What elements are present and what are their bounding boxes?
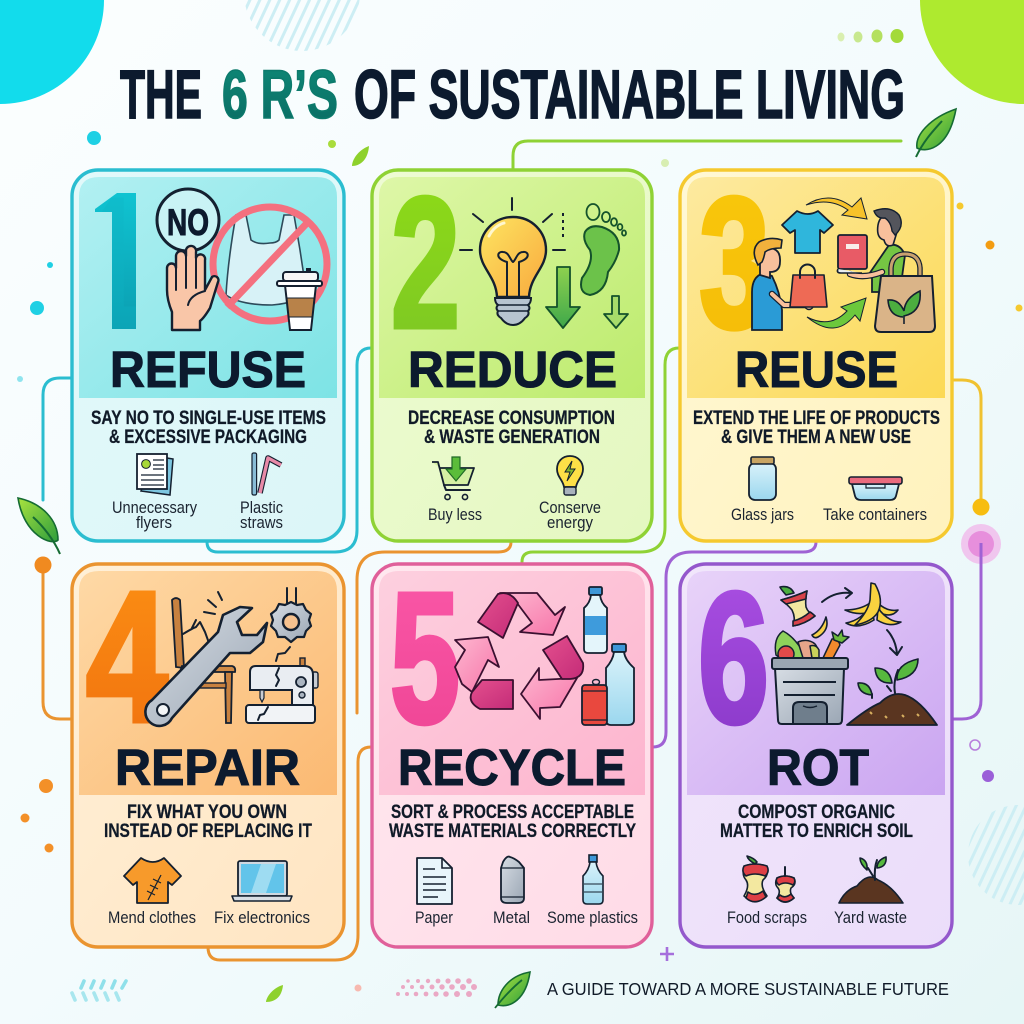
label: yard waste: Yard waste <box>834 908 907 927</box>
heading: recycle: RECYCLE <box>398 739 626 796</box>
decorative pink dot field <box>396 978 477 997</box>
description: refuse: & EXCESSIVE PACKAGING <box>109 427 307 448</box>
icon: person receiving <box>850 209 905 292</box>
icon: down arrow small <box>604 296 628 328</box>
description: reduce <box>408 408 615 448</box>
label: metal: Metal <box>493 908 530 927</box>
panel: reuse <box>680 160 952 541</box>
panel: repair <box>72 554 344 947</box>
label: buy less: Buy less <box>428 505 482 524</box>
icon: soil and sprout <box>847 659 937 725</box>
label: unnecessary flyers: flyers <box>136 513 172 532</box>
leaf left <box>18 498 60 554</box>
description: refuse <box>91 408 326 448</box>
description: reuse: & GIVE THEM A NEW USE <box>721 427 911 448</box>
small leaf bottom <box>266 985 283 1002</box>
leaf footer <box>495 972 530 1008</box>
icon: arrow to sprout <box>887 630 902 655</box>
description: reuse: EXTEND THE LIFE OF PRODUCTS <box>693 408 940 429</box>
icon: red book <box>837 235 867 273</box>
number 1 <box>95 193 136 329</box>
icon: sewing machine <box>246 658 318 723</box>
description: reduce: & WASTE GENERATION <box>424 427 600 448</box>
icon: energy bulb <box>557 456 583 495</box>
panel: refuse <box>72 161 344 541</box>
icon: down arrow large <box>546 267 580 328</box>
description: repair <box>104 802 312 842</box>
label: conserve energy <box>539 498 601 532</box>
label: plastic straws: Plastic <box>240 498 283 517</box>
decorative striped circle right <box>968 805 1024 905</box>
icon: food container <box>849 477 902 500</box>
number 6: 6 <box>698 555 769 762</box>
panel: recycle <box>372 555 652 947</box>
description: repair: FIX WHAT YOU OWN <box>127 802 287 823</box>
icon: food scraps <box>743 856 795 902</box>
icon: small water bottle <box>584 587 607 653</box>
title <box>120 56 905 133</box>
icon: green arrow <box>807 298 866 328</box>
icon: paper <box>417 858 452 904</box>
label: conserve energy: energy <box>547 513 593 532</box>
icon: flyers <box>137 454 173 495</box>
label: plastic straws <box>240 498 283 532</box>
heading: rot: ROT <box>767 739 869 796</box>
decorative corner circle: lime <box>920 0 1024 104</box>
connector node: pink target <box>961 524 1001 565</box>
icon: prohibited plastic bag <box>213 207 327 321</box>
icon: footprint <box>581 204 626 295</box>
description: recycle: SORT & PROCESS ACCEPTABLE <box>391 802 634 823</box>
description: reduce: DECREASE CONSUMPTION <box>408 408 615 429</box>
icon: person giving <box>752 238 814 330</box>
icon: plastic straws <box>252 453 281 495</box>
panel: rot <box>680 555 952 947</box>
icon: coffee cup <box>277 268 322 330</box>
icon: apple core <box>780 587 815 626</box>
icon: banana piece <box>812 617 827 638</box>
leaf top right <box>916 109 956 157</box>
connector node: orange <box>34 556 52 574</box>
description: rot: COMPOST ORGANIC <box>738 802 895 823</box>
icon: large water bottle <box>606 644 634 725</box>
label: unnecessary flyers <box>112 498 197 532</box>
icon: yard waste <box>839 857 903 903</box>
heading: reduce: REDUCE <box>408 341 617 398</box>
icon: gear <box>271 588 311 661</box>
small leaf near title <box>352 146 369 166</box>
icon: glass jar <box>749 457 776 500</box>
icon: no sign <box>157 189 219 251</box>
icon: light bulb <box>460 198 565 325</box>
label: take containers: Take containers <box>823 505 927 524</box>
icon: vegetables <box>775 630 849 662</box>
label: some plastics: Some plastics <box>547 908 638 927</box>
icon: broken chair <box>172 592 235 723</box>
icon: recycling symbol <box>455 593 583 719</box>
icon: mended shirt <box>124 858 181 903</box>
label: conserve energy: Conserve <box>539 498 601 517</box>
decorative hatch marks bottom left <box>72 981 126 1000</box>
description: reuse <box>693 408 940 448</box>
icon: no sign: NO <box>167 202 209 243</box>
icon: shopping cart <box>432 457 474 500</box>
title: THE <box>120 56 202 133</box>
label: fix electronics: Fix electronics <box>214 908 310 927</box>
icon: red shopping bag <box>790 265 827 307</box>
heading: repair: REPAIR <box>115 739 300 796</box>
icon: banana peel <box>845 583 901 626</box>
icon: compost bin <box>772 658 848 724</box>
number 4: 4 <box>86 554 168 761</box>
panel: reduce <box>372 160 652 541</box>
icon: red can <box>582 680 607 725</box>
icon: yellow arrow <box>806 198 867 219</box>
icon: laptop <box>232 861 292 901</box>
heading: reuse: REUSE <box>735 341 898 398</box>
connector lines <box>43 141 981 960</box>
number 3: 3 <box>699 160 770 367</box>
number 5: 5 <box>390 555 460 762</box>
icon: plastic bottle <box>583 855 603 904</box>
description: refuse: SAY NO TO SINGLE-USE ITEMS <box>91 408 326 429</box>
label: mend clothes: Mend clothes <box>108 908 196 927</box>
description: recycle <box>389 802 636 842</box>
description: rot: MATTER TO ENRICH SOIL <box>720 821 913 842</box>
decorative corner circle: cyan <box>0 0 104 104</box>
number 2: 2 <box>391 160 460 367</box>
description: rot <box>720 802 913 842</box>
connector node: yellow <box>972 498 990 516</box>
decorative plus <box>660 947 674 961</box>
decorative striped circle top <box>244 0 360 51</box>
label: food scraps: Food scraps <box>727 908 807 927</box>
title: 6 R’S <box>222 56 338 133</box>
icon: arrow to banana <box>822 588 852 602</box>
label: plastic straws: straws <box>240 513 283 532</box>
icon: tote bag <box>875 254 935 332</box>
icon: t-shirt <box>782 211 833 253</box>
panel: refuse: 1 <box>92 161 138 368</box>
icon: wrench <box>145 607 267 726</box>
label: glass jars: Glass jars <box>731 505 794 524</box>
label: paper: Paper <box>415 908 453 927</box>
heading: refuse: REFUSE <box>110 341 306 398</box>
description: recycle: WASTE MATERIALS CORRECTLY <box>389 821 636 842</box>
icon: metal can <box>501 857 524 903</box>
label: unnecessary flyers: Unnecessary <box>112 498 197 517</box>
footer tagline: A GUIDE TOWARD A MORE SUSTAINABLE FUTURE <box>547 979 949 999</box>
icon: raised hand <box>167 246 218 330</box>
description: repair: INSTEAD OF REPLACING IT <box>104 821 312 842</box>
